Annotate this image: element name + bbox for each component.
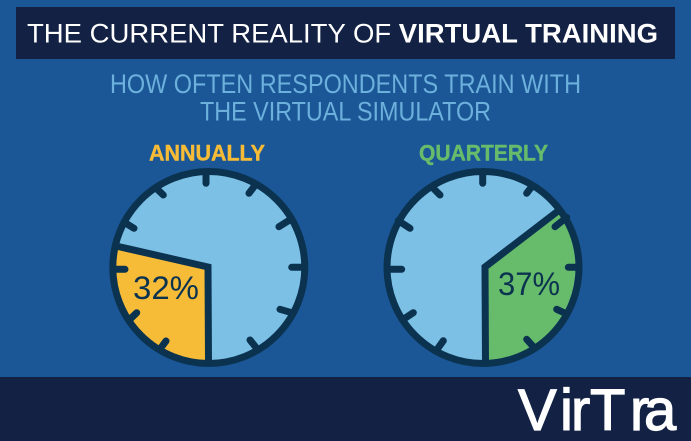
heading: annually: ANNUALLY <box>149 140 265 166</box>
title text: THE CURRENT REALITY OF VIRTUAL TRAINING <box>27 18 658 48</box>
clock chart: quarterly 37% <box>387 172 579 364</box>
footer band <box>0 377 691 441</box>
clock chart: annually 32% <box>112 172 305 364</box>
value: 37%: 37% <box>498 266 560 302</box>
subtitle: HOW OFTEN RESPONDENTS TRAIN WITH <box>110 69 581 99</box>
wedge: 32% <box>112 245 208 363</box>
value: 32%: 32% <box>133 270 199 306</box>
subtitle <box>110 69 581 126</box>
subtitle: THE VIRTUAL SIMULATOR <box>200 96 491 126</box>
wedge: 37% <box>485 212 575 363</box>
heading: quarterly: QUARTERLY <box>419 140 548 166</box>
title banner <box>16 7 675 59</box>
